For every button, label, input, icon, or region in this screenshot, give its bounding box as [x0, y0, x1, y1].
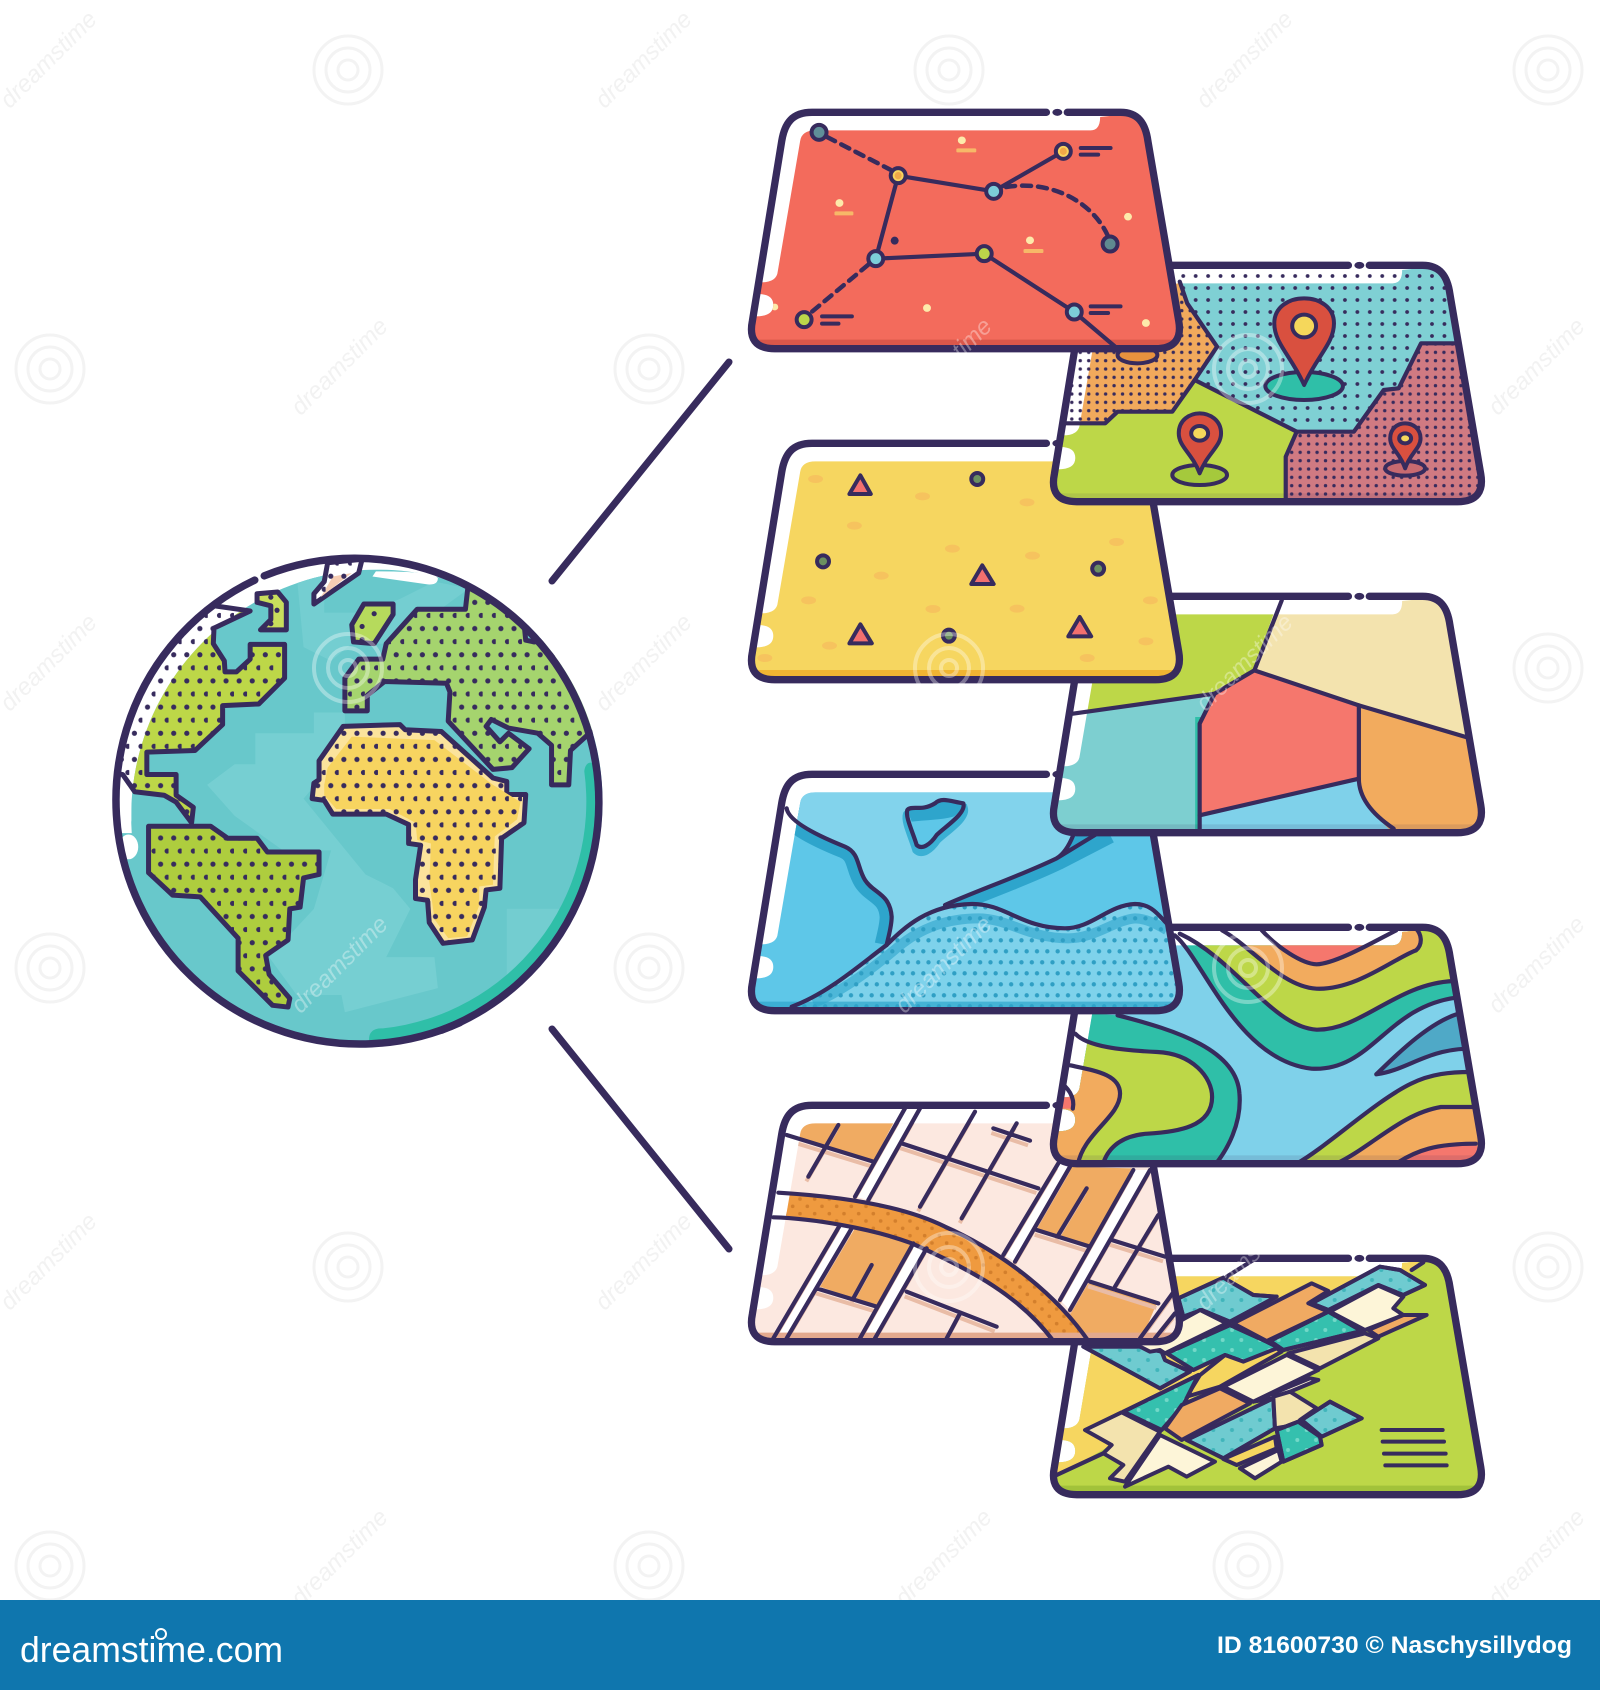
network lines [810, 137, 1116, 347]
panel: network of nodes [745, 103, 1193, 356]
Arctic island [314, 559, 362, 604]
watermark text: dreamstime [590, 609, 698, 717]
watermark text: dreamstime [590, 1208, 698, 1316]
connector line: upper [552, 362, 729, 581]
circle markers [817, 473, 1104, 642]
panel: parcels [1048, 590, 1491, 834]
lake [907, 800, 964, 852]
frame [1053, 1255, 1481, 1495]
watermark overlay on artwork: dreamstime [890, 911, 998, 1019]
globe [112, 554, 603, 1048]
watermark overlay on artwork: dreamstime [890, 313, 998, 421]
legend lines [1382, 1430, 1447, 1465]
watermark overlay on artwork: dreamstime [1191, 609, 1299, 717]
small pin [1385, 423, 1425, 476]
panel: street map [748, 1102, 1184, 1346]
watermark text: dreamstime [1483, 911, 1591, 1019]
watermark text: dreamstime [1483, 1504, 1591, 1612]
panel: regions with location pins [1043, 260, 1491, 503]
dot textures [1070, 274, 1478, 496]
ocean shadow crescent [369, 762, 602, 1040]
frame [1053, 593, 1481, 833]
footer logo: dreamstime.com [20, 1629, 283, 1670]
watermark overlay on artwork [286, 313, 1299, 1316]
panel: topography contours [1050, 924, 1486, 1168]
large pin [1265, 298, 1343, 400]
Africa [312, 725, 526, 943]
hidden pin base [1116, 352, 1160, 366]
British Isles [352, 604, 393, 644]
footer band [0, 1600, 1600, 1690]
open water [797, 792, 1070, 938]
footer credit: ID 81600730 © Naschysillydog [1217, 1632, 1572, 1659]
panel: scattered points [745, 440, 1193, 696]
frame [751, 771, 1179, 1011]
North America [104, 606, 285, 823]
dotted shallows [798, 906, 1176, 1007]
triangle markers [849, 475, 1091, 643]
Greenland [257, 592, 286, 630]
watermark overlay on artwork: dreamstime [286, 911, 394, 1019]
watermark text: dreamstime [1483, 313, 1591, 421]
street shadows [779, 1123, 1174, 1333]
watermark text: dreamstime [286, 313, 394, 421]
watermark text: dreamstime [890, 1504, 998, 1612]
Eurasia [342, 588, 594, 788]
island dots [268, 595, 377, 642]
label bars [822, 148, 1121, 324]
South America [149, 826, 319, 1007]
continents [104, 559, 617, 1007]
frame [751, 1102, 1179, 1342]
network nodes [797, 125, 1118, 327]
ocean [122, 570, 602, 1040]
watermark text: dreamstime [590, 6, 698, 114]
panel: land use patches [1050, 1254, 1486, 1498]
shoreline shadows [787, 808, 892, 945]
globe outline [116, 558, 599, 1044]
medium pin [1172, 413, 1227, 485]
frame [1053, 262, 1481, 502]
frame [1053, 924, 1481, 1164]
watermark text: dreamstime [286, 1504, 394, 1612]
region borders [1063, 282, 1458, 502]
white highlights [118, 571, 438, 859]
watermark overlay on artwork: dreamstime [1191, 1208, 1299, 1316]
frame [751, 109, 1179, 349]
panel: water bodies [748, 770, 1184, 1014]
connector line: lower [552, 1029, 729, 1249]
frame [751, 440, 1179, 680]
watermark text: dreamstime [1191, 6, 1299, 114]
